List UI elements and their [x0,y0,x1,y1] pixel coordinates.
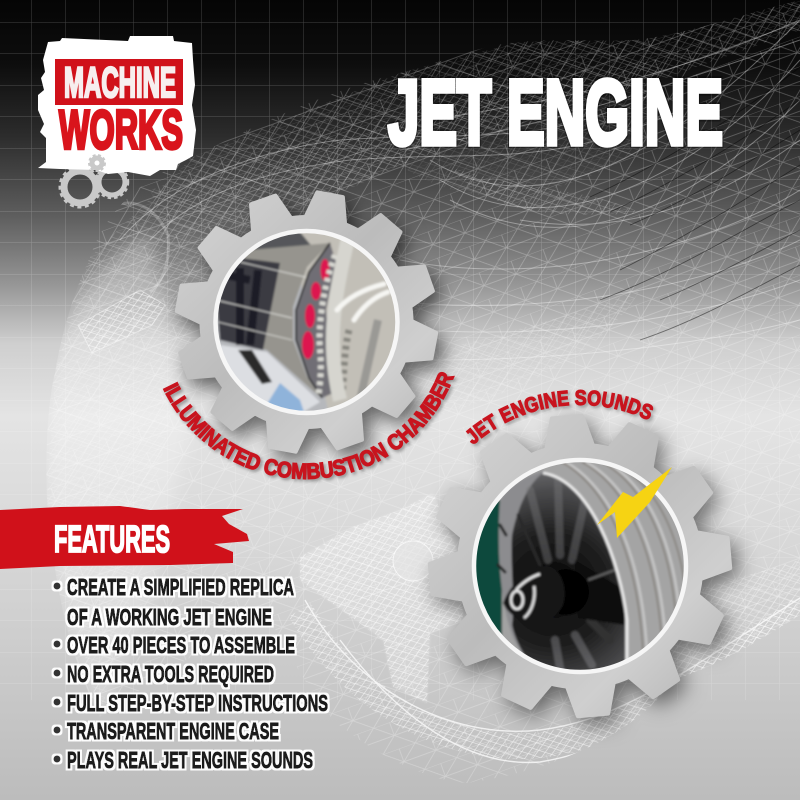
feature: sounds: PLAYS REAL JET ENGINE SOUNDS [67,747,313,773]
feature: sounds [54,747,313,773]
feature: pieces: OVER 40 PIECES TO ASSEMBLE [67,632,295,658]
logo: Machine Works [38,36,196,207]
logo gears [60,166,128,207]
logo: Machine Works: MACHINE [64,59,176,107]
feature: simplified replica: OF A WORKING JET ENGINE [67,604,272,630]
central hub mesh [300,493,463,703]
feature: no tools: NO EXTRA TOOLS REQUIRED [67,661,274,687]
curved label: jet engine sounds: JET ENGINE SOUNDS [466,390,657,448]
feature: no tools [54,661,274,687]
features heading: FEATURES [54,519,170,561]
left casing glow [56,230,173,702]
illuminated red segments [302,259,330,359]
lower ring bands [300,598,800,763]
logo small gear [89,155,105,171]
gear body [172,190,456,472]
photo ring [216,231,398,413]
icon: lightning bolt [597,467,672,538]
features list [54,574,328,773]
feature: pieces [54,632,295,658]
fan blades [498,478,610,668]
photo: illuminated combustion chamber [218,234,396,411]
inlet window and strut [78,203,168,353]
feature: simplified replica: CREATE A SIMPLIFIED REPLICA [67,574,294,600]
photo ring [474,460,686,672]
curved label: illuminated combustion chamber: ILLUMINATED COMBUSTION CHAMBER [162,372,458,484]
feature: transparent case: TRANSPARENT ENGINE CASE [67,718,279,744]
feature: instructions: FULL STEP-BY-STEP INSTRUCTIONS [67,690,328,716]
logo torn white backing [38,36,196,176]
gear body [410,400,750,740]
casing curves [120,20,800,360]
photo: jet engine fan [476,462,684,670]
fan nose cone [556,568,589,616]
features banner [0,506,249,569]
logo works wordmark: WORKS [59,98,183,160]
feature: instructions [54,690,328,716]
feature: simplified replica [54,574,294,630]
red brush stroke [0,506,249,569]
gear: combustion chamber [172,190,456,472]
gear: jet engine sounds [410,400,750,740]
outer duct rings [544,470,626,598]
dark casing lines [590,67,800,340]
feature: transparent case [54,718,279,744]
logo machine block [55,59,183,105]
